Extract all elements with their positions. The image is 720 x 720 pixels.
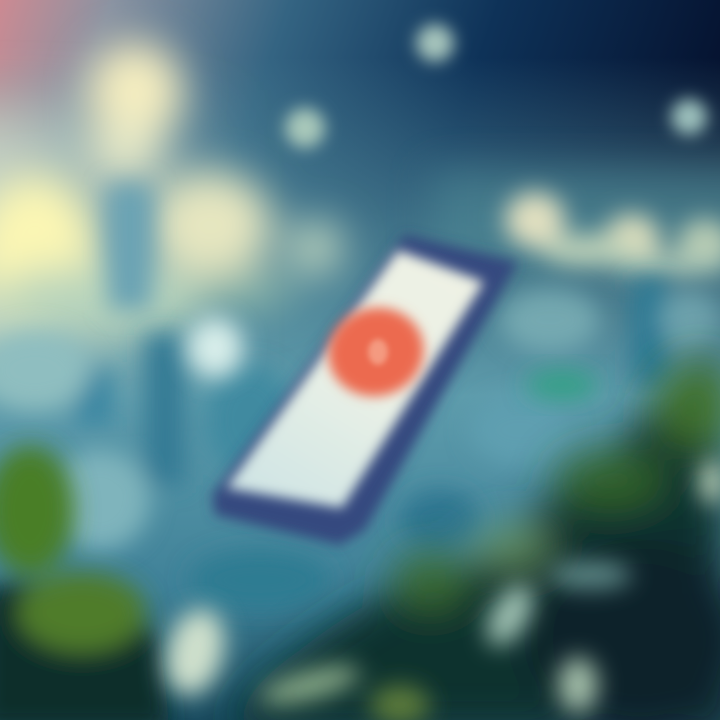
- pale foreground leaves: [157, 460, 720, 720]
- foreground foliage right: [230, 350, 720, 720]
- left tower: [108, 185, 152, 310]
- phone screen: [226, 250, 484, 508]
- clouds left: [0, 42, 343, 335]
- phone: [212, 235, 518, 545]
- red button: [318, 297, 434, 407]
- green glow: [526, 371, 598, 399]
- foreground foliage left: [0, 446, 170, 720]
- clouds right: [505, 192, 720, 277]
- button glyph: [368, 339, 388, 365]
- stars: [285, 24, 707, 148]
- phone body: [212, 235, 518, 545]
- glowing orb: [187, 318, 243, 378]
- city towers: [0, 280, 720, 610]
